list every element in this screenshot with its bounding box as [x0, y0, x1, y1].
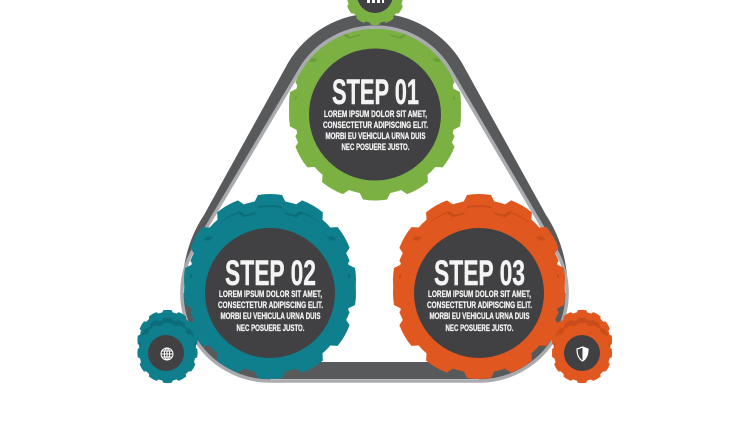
text: step 01: STEP 01 — [332, 73, 419, 112]
text: step 01: LOREM IPSUM DOLOR SIT AMET, — [324, 109, 427, 119]
text: step 01: MORBI EU VEHICULA URNA DUIS — [326, 131, 426, 141]
icon: globe — [161, 348, 173, 360]
icon: shield — [577, 347, 588, 361]
text: step 02: CONSECTETUR ADIPISCING ELIT. — [218, 300, 323, 310]
text: step 03 — [427, 254, 532, 333]
gear: step 01 green — [289, 18, 461, 200]
text: step 02: STEP 02 — [225, 254, 316, 293]
text: step 02: NEC POSUERE JUSTO. — [236, 323, 304, 333]
text: step 02: MORBI EU VEHICULA URNA DUIS — [220, 311, 320, 321]
gear: step 02 teal — [184, 194, 356, 379]
gear: step 03 orange — [393, 194, 565, 379]
text: step 02 — [218, 254, 323, 333]
text: step 01 — [323, 73, 428, 152]
text: step 03: NEC POSUERE JUSTO. — [446, 323, 514, 333]
text: step 03: STEP 03 — [434, 254, 525, 293]
text: step 03: CONSECTETUR ADIPISCING ELIT. — [427, 300, 532, 310]
text: step 03: LOREM IPSUM DOLOR SIT AMET, — [428, 289, 531, 299]
text: step 02: LOREM IPSUM DOLOR SIT AMET, — [219, 289, 322, 299]
text: step 03: MORBI EU VEHICULA URNA DUIS — [430, 311, 530, 321]
belt: dark band with light inner strip — [182, 13, 568, 381]
small gear: teal with globe — [137, 310, 198, 383]
small gear: orange with shield — [552, 310, 612, 383]
text: step 01: NEC POSUERE JUSTO. — [342, 142, 410, 152]
small gear: top green with icon — [345, 0, 405, 25]
text: step 01: CONSECTETUR ADIPISCING ELIT. — [323, 120, 428, 130]
